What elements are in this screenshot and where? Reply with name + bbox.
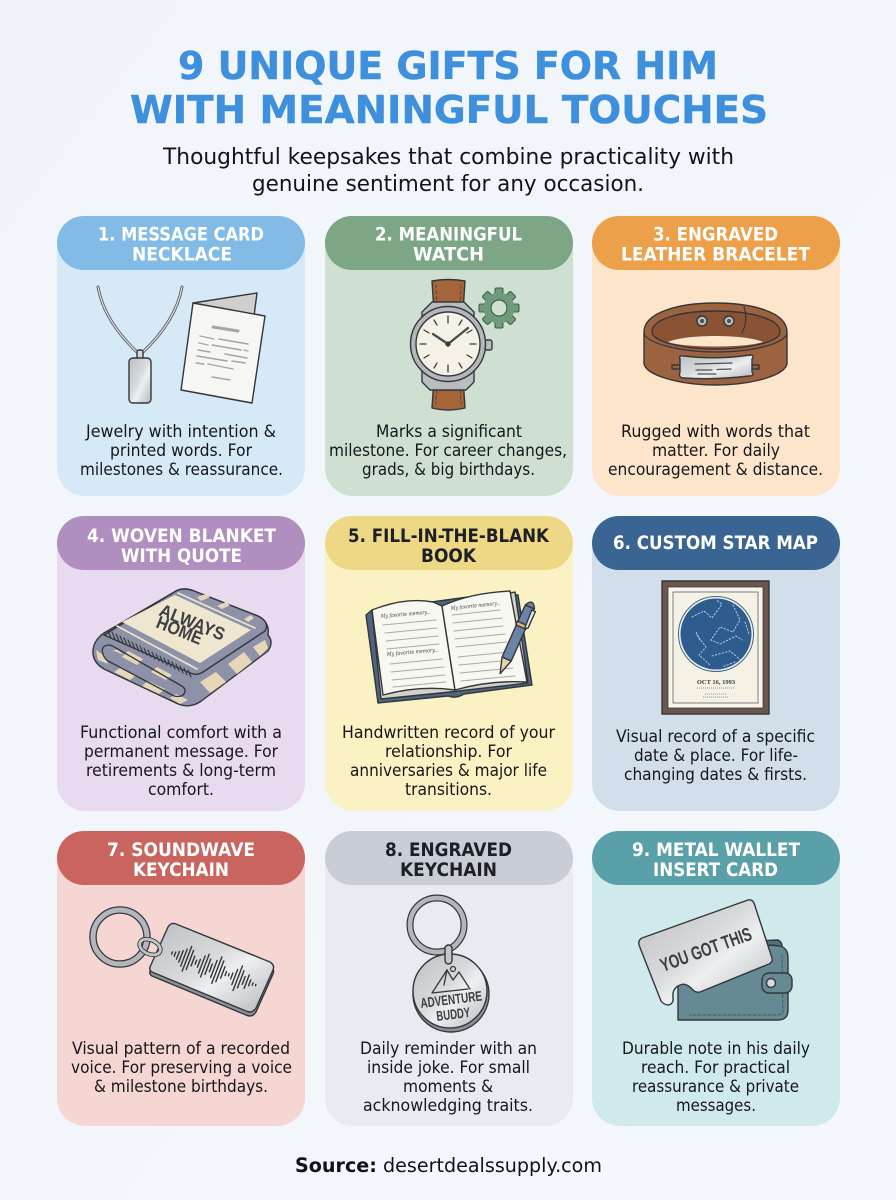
icon: message card <box>181 293 265 403</box>
book prompt text: My favorite memory... <box>386 647 439 658</box>
book prompt text <box>380 601 501 658</box>
description: 5: relationship. For <box>385 742 512 761</box>
heading: 8 <box>325 831 573 885</box>
icon: leather bracelet <box>644 303 787 385</box>
book prompt text: My favorite memory... <box>450 601 501 612</box>
heading: 7: KEYCHAIN <box>133 859 229 881</box>
keychain engraving text: BUDDY <box>435 1004 472 1024</box>
description: 2: milestone. For career changes, <box>329 441 567 460</box>
blanket quote text: HOME <box>154 612 205 649</box>
description: 1: printed words. For <box>110 441 252 460</box>
heading: 2: 2. MEANINGFUL <box>375 224 522 246</box>
description: 5 <box>342 723 555 799</box>
description: 3: matter. For daily <box>652 441 780 460</box>
heading: 4: WITH QUOTE <box>121 545 242 567</box>
subtitle: Thoughtful keepsakes that combine practicality with <box>162 144 734 170</box>
subtitle: genuine sentiment for any occasion. <box>252 171 644 197</box>
heading: 8: KEYCHAIN <box>400 859 497 881</box>
description: 6: Visual record of a specific <box>616 727 815 746</box>
icon: wallet <box>678 940 792 1020</box>
description: 8: acknowledging traits. <box>363 1096 533 1115</box>
description: 8: inside joke. For small <box>367 1058 530 1077</box>
heading: 3 <box>592 216 840 270</box>
description: 1 <box>80 422 283 479</box>
book prompt text: My favorite memory... <box>380 610 431 620</box>
description: 8: moments & <box>403 1077 493 1096</box>
heading: 4: 4. WOVEN BLANKET <box>87 525 276 547</box>
panel: 3 engraved leather bracelet <box>592 216 840 496</box>
description: 4 <box>80 723 282 799</box>
icon: necklace <box>98 287 182 403</box>
heading: 5 <box>325 516 573 570</box>
keychain engraving text: ADVENTURE <box>419 988 483 1011</box>
description: 8 <box>360 1039 537 1115</box>
description: 9: reach. For practical <box>641 1058 790 1077</box>
icon: soundwave keychain <box>93 910 274 1016</box>
icon: watch <box>410 280 492 410</box>
title: WITH MEANINGFUL TOUCHES <box>130 88 768 133</box>
description: 6: changing dates & firsts. <box>624 765 807 784</box>
description: 6: date & place. For life- <box>634 746 798 765</box>
heading: 8: 8. ENGRAVED <box>385 839 512 861</box>
description: 9 <box>622 1039 810 1115</box>
heading: 5: 5. FILL-IN-THE-BLANK <box>348 525 550 547</box>
heading: 9 <box>592 831 840 885</box>
description: 5: Handwritten record of your <box>342 723 555 742</box>
description: 7: & milestone birthdays. <box>94 1077 268 1096</box>
icon: metal card <box>639 900 772 1005</box>
icon: engraved round keychain <box>410 898 489 1032</box>
heading: 6: 6. CUSTOM STAR MAP <box>613 532 818 554</box>
keychain engraving text <box>419 988 483 1024</box>
heading: 4 <box>57 516 305 570</box>
heading: 9: 9. METAL WALLET <box>632 839 800 861</box>
heading: 1 <box>57 216 305 270</box>
heading: 3: 3. ENGRAVED <box>653 224 778 246</box>
description: 9: messages. <box>676 1096 756 1115</box>
heading: 1: 1. MESSAGE CARD <box>98 224 264 246</box>
description: 6 <box>616 727 815 784</box>
description: 7 <box>71 1039 292 1096</box>
heading: 7 <box>57 831 305 885</box>
description: 8: Daily reminder with an <box>360 1039 537 1058</box>
panel: 6 custom star map <box>592 516 840 811</box>
icon: folded blanket <box>93 589 271 706</box>
subtitle <box>162 144 734 197</box>
description: 4: Functional comfort with a <box>80 723 282 742</box>
heading: 2: WATCH <box>413 244 484 266</box>
heading: 6 <box>592 516 840 570</box>
description: 2: grads, & big birthdays. <box>362 460 535 479</box>
heading: 5: BOOK <box>421 545 477 567</box>
description: 7: Visual pattern of a recorded <box>72 1039 290 1058</box>
panel: 5 fill-in-the-blank book <box>325 516 573 811</box>
heading: 7: 7. SOUNDWAVE <box>107 839 255 861</box>
panel: 4 woven blanket with quote <box>57 516 305 811</box>
description: 9: Durable note in his daily <box>622 1039 810 1058</box>
heading: 9: INSERT CARD <box>653 859 778 881</box>
description: 3 <box>608 422 823 479</box>
icon: pen <box>495 600 538 676</box>
star map date text: OCT 16, 1993 <box>697 679 736 686</box>
blanket quote text: ALWAYS <box>157 600 228 645</box>
source line: Source: desertdealssupply.com <box>295 1154 602 1177</box>
description: 5: anniversaries & major life <box>350 761 547 780</box>
panel: 8 engraved keychain <box>325 831 573 1126</box>
icon: open book <box>366 591 538 703</box>
panel: 1 message card necklace <box>57 216 305 496</box>
title <box>130 44 768 133</box>
description: 3: Rugged with words that <box>621 422 811 441</box>
heading: 3: LEATHER BRACELET <box>621 244 810 266</box>
description: 4: permanent message. For <box>84 742 278 761</box>
description: 5: transitions. <box>405 780 492 799</box>
icon: framed star map <box>662 581 769 714</box>
panel: 7 soundwave keychain <box>57 831 305 1126</box>
title: 9 UNIQUE GIFTS FOR HIM <box>178 44 718 89</box>
description: 9: reassurance & private <box>632 1077 799 1096</box>
description: 2: Marks a significant <box>376 422 522 441</box>
description: 4: comfort. <box>148 780 214 799</box>
panel: 9 metal wallet insert card <box>592 831 840 1126</box>
icon: metal card: YOU GOT THIS <box>658 924 755 977</box>
description: 7: voice. For preserving a voice <box>71 1058 292 1077</box>
description: 2 <box>329 422 567 479</box>
description: 1: Jewelry with intention & <box>85 422 276 441</box>
description: 1: milestones & reassurance. <box>80 460 283 479</box>
soundwave <box>167 940 261 998</box>
icon: gear <box>479 288 519 328</box>
description: 4: retirements & long-term <box>86 761 276 780</box>
heading: 2 <box>325 216 573 270</box>
heading: 1: NECKLACE <box>132 244 232 266</box>
panel: 2 meaningful watch <box>325 216 573 496</box>
description: 3: encouragement & distance. <box>608 460 823 479</box>
